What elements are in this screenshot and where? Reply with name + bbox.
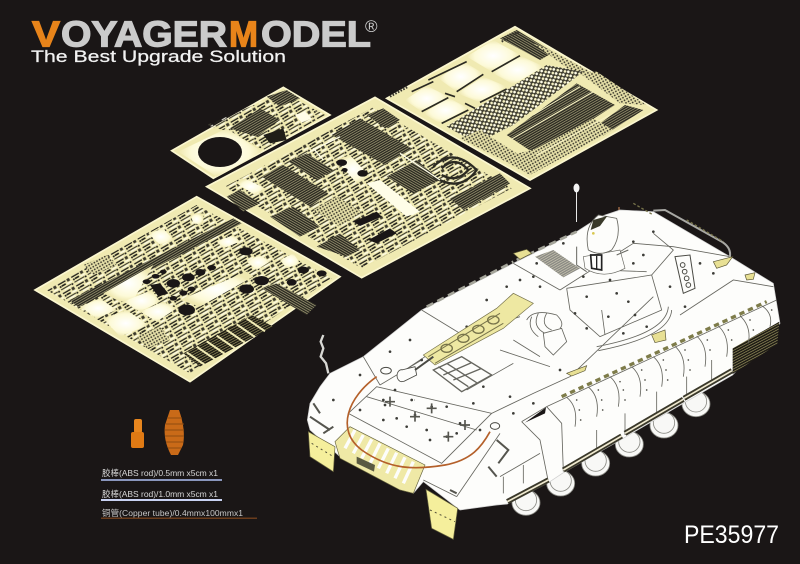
hull silhouette bbox=[307, 210, 780, 510]
rear grille bbox=[733, 322, 779, 374]
yellow small parts bbox=[513, 249, 755, 376]
gun mantlet bbox=[527, 313, 567, 355]
right mud flap bbox=[426, 489, 458, 539]
cross-shaped deck fittings bbox=[385, 397, 470, 442]
vehicle: armoured fighting vehicle line drawing bbox=[307, 203, 780, 539]
yellow etched skirt rails bbox=[507, 371, 732, 502]
brand logo: ® bbox=[365, 17, 378, 36]
orange small rod part bbox=[131, 419, 144, 448]
barrel muzzle bbox=[397, 357, 433, 382]
legend: ABS rod 1.0mm: 胶棒(ABS rod)/1.0mm x5cm x1 bbox=[102, 489, 218, 499]
product code: PE35977 bbox=[684, 521, 779, 549]
brand logo: OYAGER bbox=[61, 14, 227, 54]
side armour ribs bbox=[567, 306, 771, 427]
orange coiled tube part bbox=[165, 410, 184, 455]
left mud flap bbox=[308, 432, 335, 472]
mirror arm bbox=[321, 335, 328, 373]
tow lug left bbox=[381, 367, 391, 374]
brand logo: M bbox=[229, 14, 258, 54]
cupola turret bbox=[577, 215, 628, 274]
tow lug right bbox=[490, 423, 500, 429]
legend: copper tube: 铜管(Copper tube)/0.4mmx100mmx1 bbox=[102, 508, 243, 518]
brand logo bbox=[32, 14, 378, 54]
rivets bbox=[333, 232, 713, 440]
etched yellow bridge plate bbox=[423, 293, 533, 365]
photo-etch fret: small sheet with round hole bbox=[172, 87, 330, 178]
road wheels bbox=[512, 391, 710, 515]
brand logo: V bbox=[32, 14, 60, 54]
dark wedge gap bbox=[525, 407, 546, 423]
tagline: The Best Upgrade Solution bbox=[31, 48, 286, 66]
white post antenna bbox=[574, 184, 580, 222]
brown antenna rod bbox=[618, 207, 620, 229]
photo-etch fret: central sheet bbox=[207, 97, 530, 278]
copper tube bbox=[347, 377, 490, 468]
turret hatch lines bbox=[535, 250, 580, 277]
brand logo: ODEL bbox=[261, 14, 371, 54]
smoke launcher block bbox=[675, 255, 695, 293]
rear top rail bbox=[633, 203, 723, 242]
front deck ladder and plate bbox=[335, 427, 425, 493]
photo-etch fret: top right sheet with six panels bbox=[387, 27, 657, 180]
photo-etch fret: lower left sheet bbox=[35, 197, 340, 382]
engine deck grille bbox=[433, 357, 492, 392]
front corner fittings bbox=[310, 403, 508, 493]
legend: ABS rod 0.5mm: 胶棒(ABS rod)/0.5mm x5cm x1 bbox=[102, 468, 218, 478]
hull panel lines bbox=[348, 233, 777, 497]
roof rail bbox=[653, 210, 730, 259]
